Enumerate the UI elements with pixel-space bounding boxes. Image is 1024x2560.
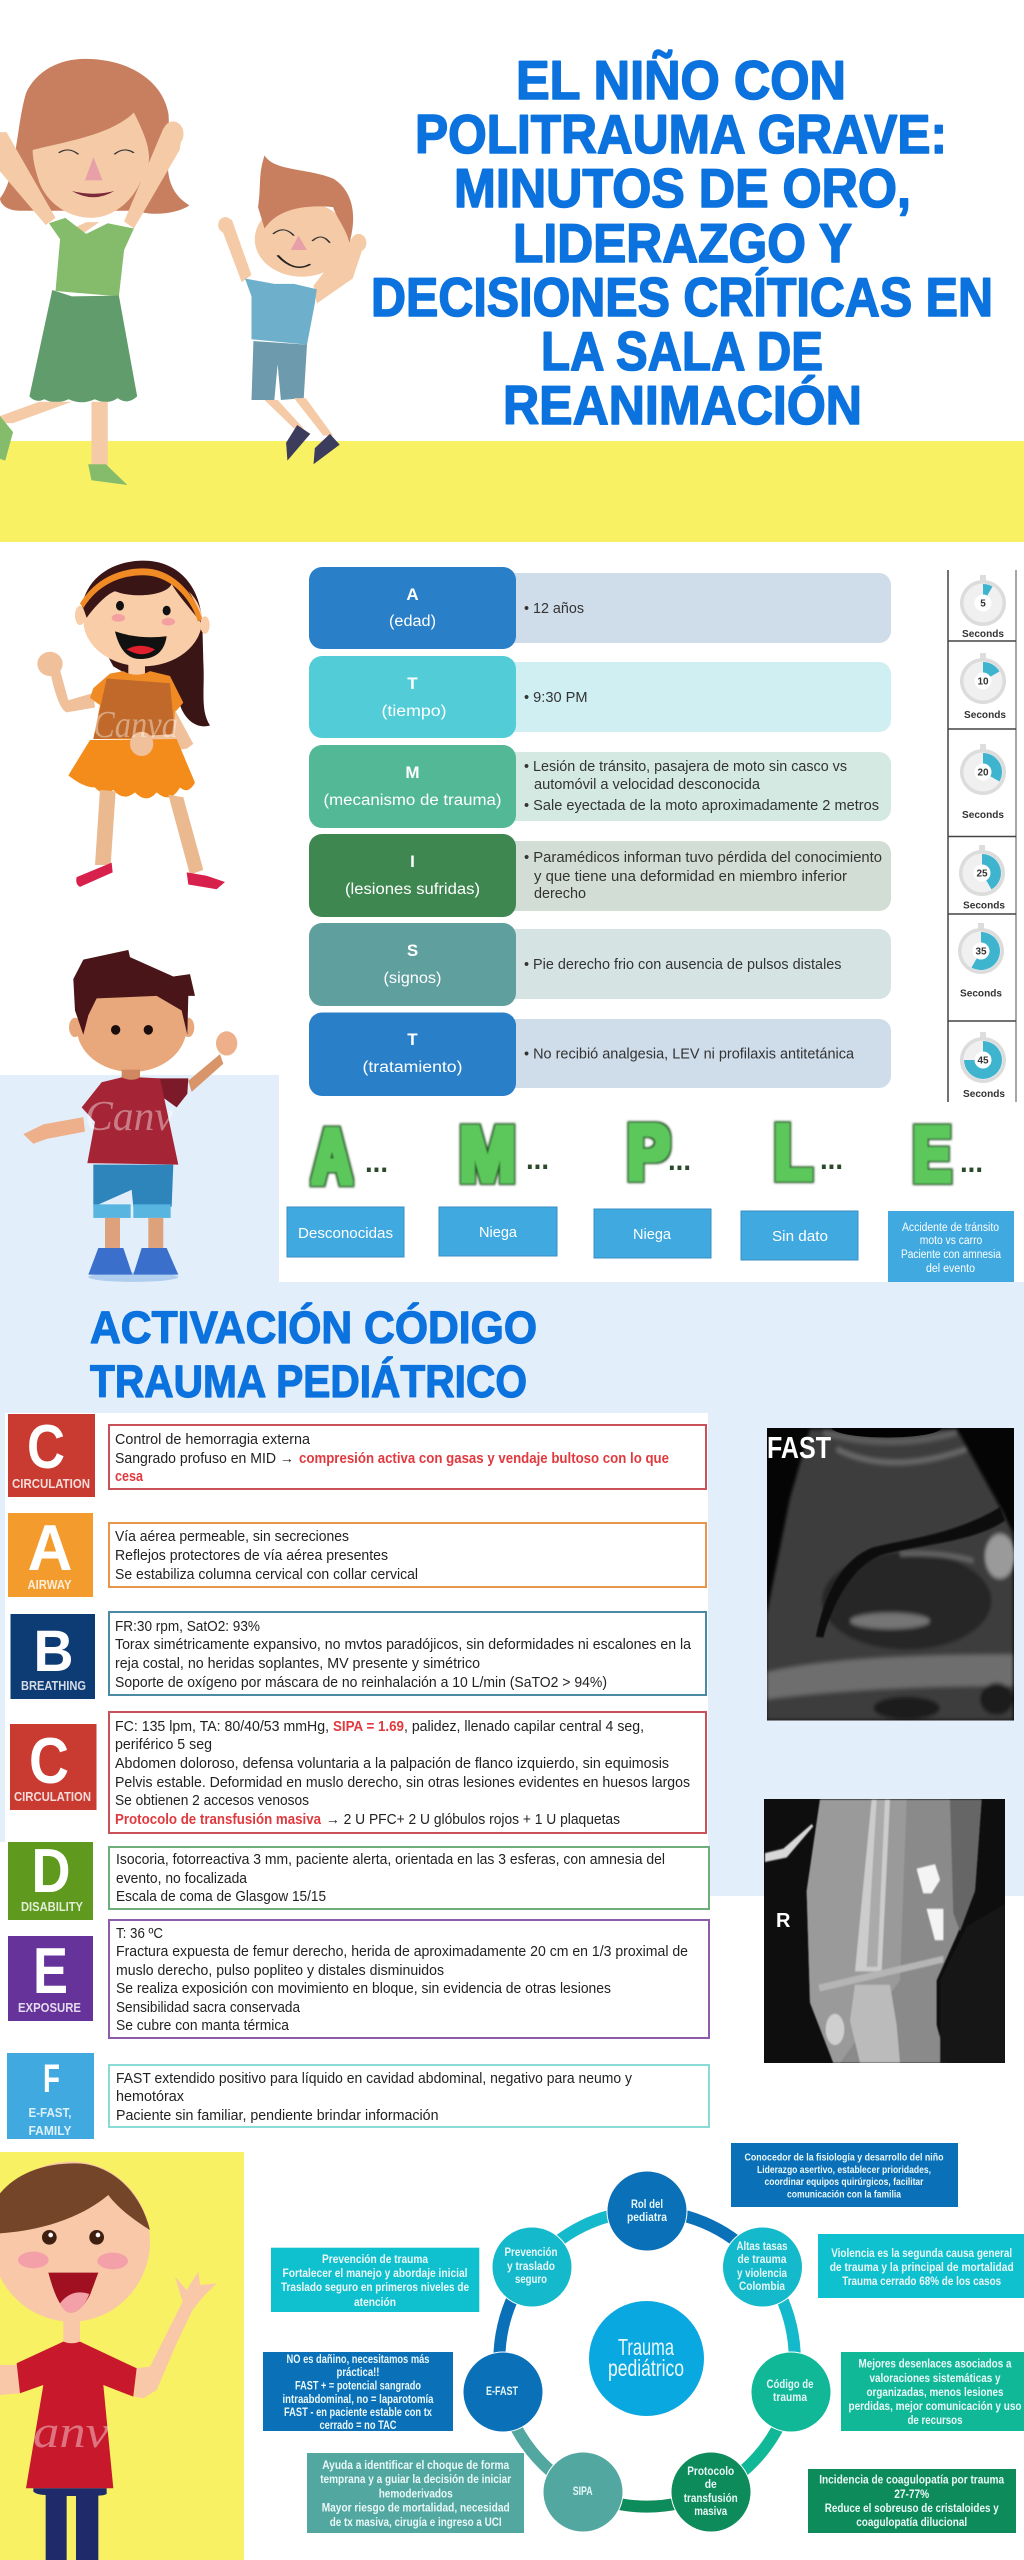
icon: C circulation second: CIRCULATION	[14, 1790, 91, 1804]
node: prevención y traslado seguro	[492, 2227, 572, 2307]
title: LA SALA DE	[541, 320, 823, 382]
title: REANIMACIÓN	[503, 374, 862, 436]
text box: e-fast: FAST extendido positivo para líquido en cavidad abdominal, negativo para neumo y	[116, 2071, 633, 2087]
text box: breathing	[109, 1612, 706, 1695]
panel: AMPLE	[287, 1108, 1014, 1282]
AMPLE letter A: A	[312, 1112, 352, 1200]
watermark: Canva: Canv	[85, 1094, 173, 1140]
node: SIPA	[543, 2452, 623, 2532]
stopwatch: 20 seconds: 20	[977, 768, 989, 778]
row: I lesiones: • Paramédicos informan tuvo pérdida del conocimiento	[524, 850, 882, 866]
stopwatch: 25 seconds: Seconds	[963, 900, 1005, 912]
text box: external haemorrhage: cesa	[115, 1469, 144, 1485]
row: I lesiones: derecho	[534, 886, 586, 902]
node: altas tasas	[722, 2227, 802, 2307]
row: T tiempo: • 9:30 PM	[524, 690, 588, 706]
icon: B breathing: BREATHING	[21, 1679, 86, 1693]
node: altas tasas: Altas tasas	[736, 2241, 788, 2253]
text box: exposure: Sensibilidad sacra conservada	[116, 2000, 301, 2016]
callout: SIPA: Ayuda a identificar el choque de forma	[322, 2460, 510, 2472]
text box: exposure: Se cubre con manta térmica	[116, 2018, 290, 2034]
AMPLE box: eventos	[888, 1211, 1014, 1282]
icon: A airway: AIRWAY	[28, 1578, 72, 1592]
stopwatch: 45 seconds	[960, 1032, 1006, 1100]
row: T tiempo	[309, 656, 891, 738]
AMPLE letter M: ...	[526, 1143, 549, 1176]
AMPLE letter P: ...	[668, 1144, 691, 1177]
AMPLE box: eventos: del evento	[926, 1263, 975, 1275]
stopwatch: 25 seconds	[959, 845, 1005, 912]
row: I lesiones: y que tiene una deformidad en miembro inferior	[534, 869, 847, 885]
row: S signos	[309, 923, 891, 1006]
node: código de trauma: trauma	[773, 2392, 808, 2404]
callout: rol del pediatra	[731, 2143, 958, 2207]
label: R: R	[776, 1910, 791, 1932]
illustration: son	[218, 155, 366, 464]
panel: primary survey F	[7, 2053, 709, 2139]
icon: A airway	[8, 1511, 93, 1597]
node: código de trauma: Código de	[766, 2379, 814, 2391]
icon: F e-fast family: E-FAST,	[28, 2106, 72, 2120]
illustration: boy with yellow background	[0, 2152, 244, 2560]
row: I lesiones: (lesiones sufridas)	[345, 881, 480, 898]
text box: circulation: Pelvis estable. Deformidad en muslo derecho, sin otras lesiones evidentes en huesos largos	[115, 1775, 690, 1791]
text box: exposure: Fractura expuesta de femur derecho, herida de aproximadamente 20 cm en 1/3 proximal de	[116, 1944, 688, 1960]
row: S signos: (signos)	[384, 970, 442, 987]
callout: rol del pediatra: comunicación con la familia	[787, 2188, 901, 2200]
callout: prevención: atención	[354, 2297, 396, 2309]
callout: código de trauma: de recursos	[908, 2415, 962, 2427]
callout: SIPA: de tx masiva, cirugía e ingreso a UCI	[330, 2517, 502, 2529]
panel: primary survey D	[8, 1837, 709, 1920]
stopwatch: 35 seconds: Seconds	[960, 988, 1002, 1000]
callout: coagulopatía: coagulopatía dilucional	[856, 2517, 967, 2529]
text box: e-fast: hemotórax	[116, 2089, 185, 2105]
node: protocolo de transfusión masiva: masiva	[694, 2506, 728, 2518]
text box: exposure: Se realiza exposición con movimiento en bloque, sin evidencia de otras lesiones	[116, 1981, 611, 1997]
callout: código de trauma: valoraciones sistemáticas y	[870, 2373, 1001, 2385]
text box: external haemorrhage: Control de hemorragia externa	[115, 1432, 311, 1448]
stopwatch: 45 seconds: Seconds	[963, 1088, 1005, 1100]
node: prevención y traslado seguro: y traslado	[507, 2261, 555, 2273]
diagram: trauma pediátrico cycle	[463, 2171, 831, 2532]
text box: circulation	[109, 1712, 706, 1833]
node: SIPA: SIPA	[573, 2486, 593, 2498]
callout: SIPA: hemoderivados	[379, 2488, 453, 2500]
row: M mecanismo: (mecanismo de trauma)	[324, 792, 502, 809]
icon: C circulation second: C	[29, 1724, 69, 1797]
icon: A airway: A	[28, 1511, 72, 1584]
AMPLE box: medicamentos	[439, 1207, 557, 1256]
text box: circulation: periférico 5 seg	[115, 1737, 212, 1753]
row: T tratamiento	[309, 1012, 891, 1096]
text box: circulation: SIPA = 1.69	[333, 1719, 404, 1735]
row: T tratamiento: T	[407, 1030, 418, 1049]
label: FAST: FAST	[767, 1430, 831, 1465]
node: altas tasas: de trauma	[738, 2254, 787, 2266]
center node: trauma pediátrico	[589, 2301, 704, 2416]
image: FAST ultrasound	[767, 1418, 1015, 1721]
stopwatch: 20 seconds	[960, 744, 1006, 821]
callout: prevención: Prevención de trauma	[322, 2254, 429, 2266]
node: código de trauma	[751, 2352, 831, 2432]
connector arcs	[499, 2211, 795, 2507]
callout: e-fast: FAST + = potencial sangrado	[295, 2380, 421, 2392]
text box: external haemorrhage	[109, 1425, 706, 1489]
center node: trauma pediátrico: Trauma	[618, 2334, 674, 2360]
callout: SIPA	[307, 2453, 524, 2533]
AMPLE box: medicamentos: Niega	[479, 1224, 518, 1241]
callout: SIPA: Mayor riesgo de mortalidad, necesidad	[322, 2502, 510, 2514]
callout: e-fast	[263, 2352, 453, 2432]
icon: B breathing: B	[34, 1619, 74, 1684]
callout: e-fast: FAST - en paciente estable con tx	[284, 2407, 432, 2419]
text box: circulation: FC: 135 lpm, TA: 80/40/53 mmHg,	[115, 1719, 329, 1735]
row: M mecanismo: automóvil a velocidad desconocida	[534, 777, 761, 793]
callout: código de trauma	[841, 2352, 1024, 2431]
row: M mecanismo: • Lesión de tránsito, pasajera de moto sin casco vs	[524, 759, 847, 775]
icon: C circulation second	[10, 1724, 96, 1810]
panel: ATMIST table	[309, 567, 891, 1096]
stopwatch: 10 seconds: Seconds	[964, 709, 1006, 721]
text box: circulation: , palidez, llenado capilar central 4 seg,	[404, 1719, 644, 1735]
row: A edad	[309, 567, 891, 649]
row: M mecanismo: M	[405, 763, 420, 782]
AMPLE letter A: ...	[365, 1146, 388, 1179]
row: T tiempo: (tiempo)	[382, 703, 446, 720]
panel: stopwatches column	[948, 570, 1016, 1102]
callout: prevención	[271, 2248, 479, 2312]
row: T tiempo: T	[407, 674, 418, 693]
AMPLE letter E: ...	[960, 1146, 983, 1179]
text box: disability: evento, no focalizada	[116, 1871, 248, 1887]
AMPLE box: eventos: Accidente de tránsito	[902, 1222, 999, 1234]
AMPLE box: eventos: Paciente con amnesia	[901, 1249, 1002, 1261]
watermark: Canva: anv	[33, 2406, 110, 2457]
text box: breathing: reja costal, no heridas soplantes, MV presente y simétrico	[115, 1656, 480, 1672]
icon: F e-fast family: FAMILY	[28, 2124, 72, 2138]
icon: D disability: DISABILITY	[21, 1900, 84, 1914]
icon: C circulation	[8, 1413, 95, 1497]
text box: disability	[109, 1847, 709, 1909]
text box: airway: Reflejos protectores de vía aérea presentes	[115, 1548, 388, 1564]
node: altas tasas: y violencia	[737, 2268, 788, 2280]
panel: primary survey C	[8, 1413, 706, 1497]
icon: C circulation: CIRCULATION	[12, 1477, 90, 1491]
callout: prevención: Traslado seguro en primeros niveles de	[281, 2282, 469, 2294]
AMPLE letter L: ...	[820, 1143, 843, 1176]
callout: e-fast: intraabdominal, no = laparotomía	[282, 2394, 434, 2406]
callout: código de trauma: organizadas, menos lesiones	[866, 2387, 1004, 2399]
panel: primary survey A	[8, 1511, 706, 1597]
node: prevención y traslado seguro: seguro	[515, 2274, 547, 2286]
AMPLE box: patologias	[594, 1209, 711, 1258]
AMPLE box: liquidos: Sin dato	[772, 1228, 828, 1245]
AMPLE box: liquidos	[741, 1211, 858, 1260]
title: POLITRAUMA GRAVE:	[415, 103, 947, 165]
icon: E exposure	[8, 1934, 93, 2021]
heading: activación código trauma pediátrico: TRAUMA PEDIÁTRICO	[90, 1356, 527, 1407]
title: LIDERAZGO Y	[513, 212, 852, 274]
stopwatch: 10 seconds: 10	[977, 676, 989, 688]
text box: circulation: Protocolo de transfusión masiva	[115, 1812, 322, 1828]
stopwatch: 5 seconds	[960, 575, 1006, 640]
icon: B breathing	[10, 1614, 95, 1699]
node: altas tasas: Colombia	[739, 2281, 786, 2293]
AMPLE letter L	[774, 1108, 843, 1196]
icon: F e-fast family	[7, 2053, 94, 2139]
AMPLE box: patologias: Niega	[633, 1226, 672, 1243]
callout: coagulopatía: Incidencia de coagulopatía por trauma	[819, 2474, 1005, 2486]
text box: external haemorrhage: Sangrado profuso en MID →	[115, 1451, 294, 1467]
AMPLE letter L: L	[774, 1108, 812, 1196]
node: protocolo de transfusión masiva: transfusión	[684, 2493, 738, 2505]
text box: circulation: Abdomen doloroso, defensa voluntaria a la palpación de flanco izquierdo, sin equimosis	[115, 1756, 669, 1772]
node: rol del pediatra: Rol del	[631, 2199, 663, 2211]
row: I lesiones: I	[410, 852, 415, 871]
row: A edad: (edad)	[389, 613, 436, 630]
node: protocolo de transfusión masiva	[671, 2452, 751, 2532]
callout: e-fast: práctica!!	[336, 2367, 380, 2379]
text box: airway: Vía aérea permeable, sin secreciones	[115, 1529, 349, 1545]
row: T tratamiento: (tratamiento)	[362, 1059, 462, 1076]
text box: disability: Escala de coma de Glasgow 15/15	[116, 1889, 326, 1905]
callout: coagulopatía: 27-77%	[894, 2489, 929, 2501]
stopwatch: 5 seconds: Seconds	[962, 628, 1004, 640]
icon: E exposure: EXPOSURE	[18, 2001, 81, 2015]
icon: E exposure: E	[33, 1934, 68, 2007]
callout: violencia	[818, 2234, 1024, 2298]
node: protocolo de transfusión masiva: Protocolo	[687, 2466, 734, 2478]
title: EL NIÑO CON	[516, 49, 846, 111]
row: S signos: S	[407, 941, 418, 960]
center node: trauma pediátrico: pediátrico	[608, 2355, 684, 2381]
AMPLE letter M: M	[459, 1110, 516, 1198]
callout: SIPA: temprana y a guiar la decisión de iniciar	[320, 2474, 512, 2486]
text box: airway: Se estabiliza columna cervical con collar cervical	[115, 1567, 418, 1583]
text box: breathing: Torax simétricamente expansivo, no mvtos paradójicos, sin deformidades ni escalones en la	[115, 1637, 692, 1653]
callout: coagulopatía	[808, 2469, 1016, 2533]
text box: e-fast: Paciente sin familiar, pendiente brindar información	[116, 2108, 438, 2124]
callout: prevención: Fortalecer el manejo y abordaje inicial	[282, 2268, 468, 2280]
node: rol del pediatra	[607, 2171, 687, 2251]
AMPLE letter E: E	[913, 1110, 951, 1198]
text box: exposure: T: 36 ºC	[116, 1926, 163, 1942]
panel: primary survey E	[8, 1920, 709, 2038]
panel: primary survey B	[10, 1612, 706, 1699]
node: prevención y traslado seguro: Prevención	[504, 2247, 558, 2259]
illustration: mother	[0, 59, 189, 485]
text box: disability: Isocoria, fotorreactiva 3 mm, paciente alerta, orientada en las 3 esferas, con amnesia del	[116, 1852, 665, 1868]
AMPLE box: alergias: Desconocidas	[298, 1225, 393, 1242]
title	[371, 49, 993, 436]
callout: coagulopatía: Reduce el sobreuso de cristaloides y	[825, 2503, 999, 2515]
illustration: mother and son jumping	[0, 59, 366, 485]
stopwatch: 35 seconds: 35	[975, 946, 987, 958]
heading: activación código trauma pediátrico	[90, 1302, 537, 1407]
stopwatch: 10 seconds	[960, 653, 1006, 721]
panel: primary survey C second	[10, 1712, 706, 1833]
node: protocolo de transfusión masiva: de	[705, 2479, 717, 2491]
callout: rol del pediatra: Liderazgo asertivo, establecer prioridades,	[757, 2164, 931, 2176]
row: M mecanismo	[309, 745, 891, 828]
node: E-FAST	[463, 2352, 543, 2432]
heading: activación código trauma pediátrico: ACTIVACIÓN CÓDIGO	[90, 1302, 537, 1353]
icon: D disability	[8, 1837, 93, 1920]
callout: rol del pediatra: Conocedor de la fisiología y desarrollo del niño	[744, 2152, 944, 2164]
node: E-FAST: E-FAST	[486, 2386, 518, 2398]
stopwatch: 5 seconds: 5	[980, 598, 986, 610]
stopwatch: 20 seconds: Seconds	[962, 809, 1004, 821]
row: M mecanismo: • Sale eyectada de la moto aproximadamente 2 metros	[524, 798, 879, 814]
text box: airway	[109, 1523, 706, 1587]
text box: breathing: FR:30 rpm, SatO2: 93%	[115, 1619, 260, 1635]
stopwatch: 35 seconds	[958, 923, 1004, 1000]
stopwatch: 25 seconds: 25	[976, 868, 988, 880]
callout: violencia: Trauma cerrado 68% de los casos	[842, 2276, 1001, 2288]
text box: external haemorrhage: compresión activa con gasas y vendaje bultoso con lo que	[299, 1451, 669, 1467]
row: T tratamiento: • No recibió analgesia, LEV ni profilaxis antitetánica	[524, 1046, 855, 1062]
illustration: boy waving	[23, 950, 237, 1282]
row: S signos: • Pie derecho frio con ausencia de pulsos distales	[524, 957, 842, 973]
callout: e-fast: NO es dañino, necesitamos más	[286, 2354, 430, 2366]
callout: e-fast: cerrado = no TAC	[320, 2420, 396, 2432]
row: I lesiones	[309, 834, 891, 917]
watermark: Canva: Canva	[93, 704, 178, 746]
icon: C circulation: C	[27, 1413, 65, 1482]
row: A edad: A	[406, 585, 419, 604]
text box: exposure: muslo derecho, pulso popliteo y distales disminuidos	[116, 1963, 444, 1979]
text box: e-fast	[109, 2065, 709, 2127]
illustration: girl	[37, 561, 225, 889]
text box: exposure	[109, 1920, 709, 2038]
AMPLE box: eventos: moto vs carro	[920, 1235, 982, 1247]
node: rol del pediatra: pediatra	[627, 2212, 668, 2224]
icon: F e-fast family: F	[43, 2057, 60, 2101]
text box: circulation: Se obtienen 2 accesos venosos	[115, 1793, 309, 1809]
title: MINUTOS DE ORO,	[454, 157, 911, 219]
image: femur x-ray	[764, 1799, 1005, 2063]
text box: breathing: Soporte de oxígeno por máscara de no reinhalación a 10 L/min (SaTO2 > 94%)	[115, 1675, 607, 1691]
callout: rol del pediatra: coordinar equipos quirúrgicos, facilitar	[764, 2176, 924, 2188]
icon: D disability: D	[32, 1837, 70, 1906]
row: A edad: • 12 años	[524, 601, 584, 617]
stopwatch: 45 seconds: 45	[977, 1056, 989, 1066]
text box: circulation: → 2 U PFC+ 2 U glóbulos rojos + 1 U plaquetas	[326, 1812, 620, 1828]
AMPLE letter P: P	[627, 1108, 670, 1196]
AMPLE box: alergias	[287, 1207, 404, 1257]
